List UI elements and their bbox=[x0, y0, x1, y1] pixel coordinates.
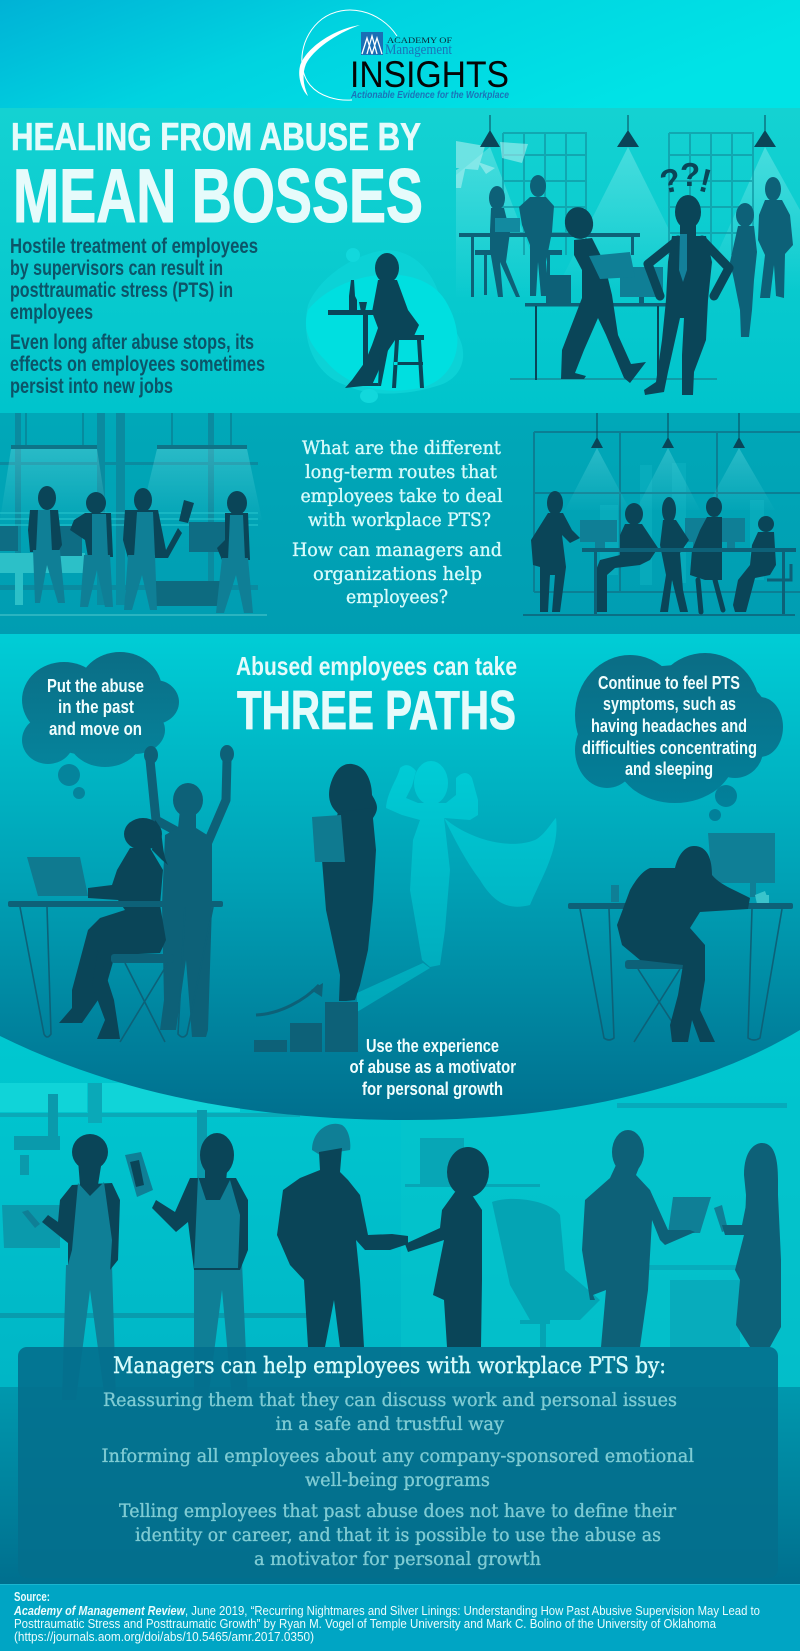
walking employee with papers bbox=[561, 204, 646, 383]
man colleague right bbox=[758, 177, 793, 298]
manager action list bbox=[102, 1389, 694, 1570]
panel: three paths bbox=[0, 634, 800, 1120]
logo: Actionable Evidence for the Workplace bbox=[350, 89, 509, 101]
title: MEAN BOSSES bbox=[13, 154, 423, 239]
man with laptop bbox=[582, 1130, 711, 1347]
pills and bottle bbox=[611, 885, 769, 904]
question text: long-term routes that bbox=[305, 461, 497, 483]
intro text: persist into new jobs bbox=[10, 375, 173, 398]
thought cloud: PTS symptoms: and sleeping bbox=[625, 759, 713, 779]
heading: three paths bbox=[236, 651, 517, 741]
superhero shadow bbox=[357, 761, 557, 1012]
desk and stool bbox=[568, 903, 793, 1042]
manager action list: Informing all employees about any company-sponsored emotional bbox=[102, 1445, 694, 1467]
panel: lower workplace scene bbox=[0, 1030, 800, 1585]
worker with tablet bbox=[125, 1133, 248, 1400]
question text: employees? bbox=[346, 586, 448, 608]
monitor bbox=[708, 833, 775, 897]
intro text: Even long after abuse stops, its bbox=[10, 331, 254, 354]
panel: source bbox=[0, 1584, 800, 1651]
desk and stool bbox=[8, 901, 223, 1042]
path 1: celebrating man and woman at desk bbox=[8, 745, 234, 1042]
thought cloud: move on: Put the abuse bbox=[47, 676, 144, 696]
manager action list: Reassuring them that they can discuss work and personal issues bbox=[103, 1389, 677, 1411]
front desk bbox=[510, 267, 717, 380]
woman colleague right bbox=[730, 203, 757, 337]
panel: hero bbox=[0, 108, 800, 413]
manager action list: well-being programs bbox=[305, 1469, 490, 1491]
document bbox=[312, 815, 345, 862]
question text: with workplace PTS? bbox=[308, 509, 491, 531]
question text: organizations help bbox=[313, 563, 482, 585]
worker 2 bbox=[70, 492, 113, 607]
office group with confused boss bbox=[459, 156, 793, 395]
source text bbox=[13, 1589, 760, 1644]
callout: personal growth: Use the experience bbox=[366, 1036, 499, 1056]
question and exclamation marks: ? bbox=[656, 160, 684, 201]
callout: personal growth bbox=[350, 1036, 516, 1099]
callout: personal growth: of abuse as a motivator bbox=[350, 1057, 516, 1077]
question text bbox=[292, 437, 502, 608]
question and exclamation marks bbox=[656, 156, 715, 201]
intro text: by supervisors can result in bbox=[10, 257, 223, 280]
back desk with two colleagues bbox=[459, 175, 640, 297]
rising arrow bbox=[256, 983, 323, 1015]
meeting office scene bbox=[523, 413, 800, 616]
scene background details bbox=[0, 1083, 787, 1350]
woman shaking hands bbox=[405, 1147, 489, 1347]
intro text bbox=[10, 235, 265, 398]
worker 4 with box bbox=[189, 491, 253, 613]
worker 3 with tablet bbox=[123, 488, 194, 610]
intro text: posttraumatic stress (PTS) in bbox=[10, 279, 233, 302]
manager action list: a motivator for personal growth bbox=[254, 1548, 541, 1570]
laptop bbox=[27, 857, 88, 896]
woman with phone bbox=[714, 1143, 781, 1347]
slumped woman bbox=[617, 846, 750, 1042]
factory scene bbox=[0, 413, 267, 616]
path 3: slumped woman at desk bbox=[568, 833, 793, 1042]
question text: What are the different bbox=[302, 437, 501, 459]
seated man bbox=[596, 503, 658, 612]
thought cloud: PTS symptoms: difficulties concentrating bbox=[582, 738, 757, 758]
thought cloud: PTS symptoms: Continue to feel PTS bbox=[598, 673, 740, 693]
panel: manager actions bbox=[18, 1347, 778, 1578]
thought cloud: move on bbox=[22, 652, 179, 799]
manager action list: in a safe and trustful way bbox=[276, 1413, 504, 1435]
seated woman bbox=[733, 516, 791, 612]
source text: Academy of Management Review bbox=[13, 1603, 186, 1618]
title: HEALING FROM ABUSE BY bbox=[11, 116, 421, 159]
intro text: Hostile treatment of employees bbox=[10, 235, 258, 258]
heading: three paths: Abused employees can take bbox=[236, 651, 517, 681]
thought cloud: PTS symptoms: having headaches and bbox=[591, 716, 747, 736]
seated woman bbox=[59, 818, 168, 1039]
standing woman bbox=[660, 497, 689, 612]
thought cloud: PTS symptoms: symptoms, such as bbox=[603, 694, 736, 714]
confused boss bbox=[644, 195, 729, 395]
hero office scene background bbox=[456, 115, 800, 300]
intro text: effects on employees sometimes bbox=[10, 353, 265, 376]
rising steps bbox=[254, 1002, 358, 1052]
manager action list: identity or career, and that it is possible to use the abuse as bbox=[135, 1524, 661, 1546]
meeting desk bbox=[582, 548, 796, 614]
worker 1 bbox=[28, 486, 65, 603]
question and exclamation marks: ! bbox=[696, 161, 715, 200]
standing woman bbox=[322, 764, 377, 1001]
manager action list: Telling employees that past abuse does not have to define their bbox=[119, 1500, 677, 1522]
manager in hard hat bbox=[277, 1124, 408, 1347]
worker left bbox=[22, 1134, 120, 1400]
thought cloud: move on: in the past bbox=[58, 697, 134, 717]
logo bbox=[299, 10, 509, 101]
manager heading: Managers can help employees with workplace PTS by: bbox=[113, 1354, 666, 1379]
source text: (https://journals.aom.org/doi/abs/10.5465/amr.2017.0350) bbox=[14, 1629, 314, 1644]
title bbox=[11, 116, 423, 239]
question text: How can managers and bbox=[292, 539, 502, 561]
logo: Management bbox=[385, 42, 453, 58]
source text: Posttraumatic Stress and Posttraumatic Growth” by Ryan M. Vogel of Temple University and Mark C. Bolino of the University of Oklahoma bbox=[14, 1616, 717, 1631]
header band bbox=[0, 0, 800, 108]
woman facing desk bbox=[690, 497, 723, 612]
logo: INSIGHTS bbox=[350, 54, 509, 95]
celebrating man bbox=[144, 745, 234, 1037]
woman at bar table bbox=[306, 248, 463, 403]
source text: Source: bbox=[14, 1589, 50, 1604]
monitors bbox=[580, 518, 745, 548]
thought cloud: PTS symptoms bbox=[575, 653, 783, 821]
intro text: employees bbox=[10, 301, 93, 324]
path 2: woman with superhero shadow bbox=[254, 761, 557, 1052]
callout: personal growth: for personal growth bbox=[362, 1079, 503, 1099]
question text: employees take to deal bbox=[300, 485, 502, 507]
panel: questions band bbox=[0, 413, 800, 634]
heading: three paths: THREE PATHS bbox=[237, 679, 516, 741]
question and exclamation marks: ? bbox=[680, 156, 700, 193]
standing man bbox=[531, 491, 580, 612]
logo: ACADEMY OF bbox=[387, 36, 453, 45]
thought cloud: move on: and move on bbox=[49, 719, 142, 739]
